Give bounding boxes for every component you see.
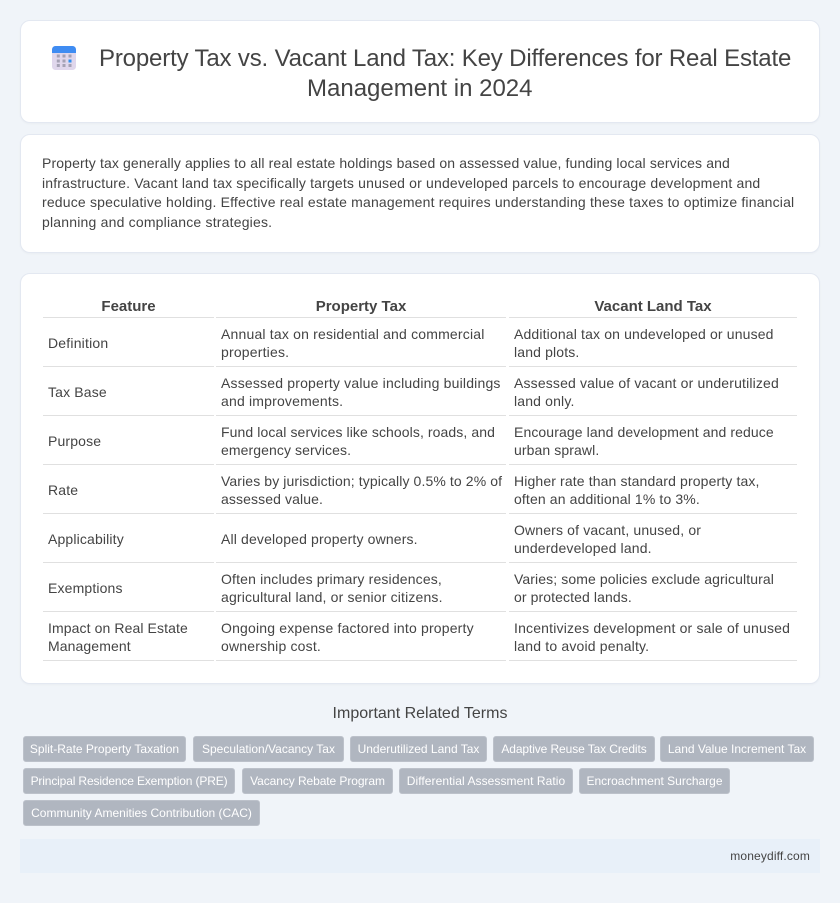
comparison table xyxy=(43,298,797,661)
title xyxy=(99,45,791,102)
row: impact: Impact on Real Estate xyxy=(48,620,188,636)
row: exemptions: Often includes primary residences, xyxy=(221,571,442,587)
header: feature: Feature xyxy=(101,298,156,315)
row: tax base: and improvements. xyxy=(221,393,343,409)
row: purpose: emergency services. xyxy=(221,442,351,458)
title: Management in 2024 xyxy=(307,74,532,102)
tag xyxy=(23,736,186,762)
header card xyxy=(20,20,820,123)
row: purpose xyxy=(48,424,774,458)
related terms heading: Important Related Terms xyxy=(333,705,507,722)
row: definition: land plots. xyxy=(514,344,579,360)
row: impact: Management xyxy=(48,638,131,654)
table card xyxy=(20,273,820,684)
intro text: Property tax generally applies to all real estate holdings based on assessed value, funding local services and xyxy=(42,155,730,171)
intro text: planning and compliance strategies. xyxy=(42,214,272,230)
row: rate xyxy=(48,473,760,507)
tag: Community Amenities Contribution (CAC) xyxy=(31,806,252,820)
row: definition: Additional tax on undeveloped or unused xyxy=(514,326,774,342)
row: impact xyxy=(48,620,790,654)
intro card xyxy=(20,134,820,253)
row: exemptions: Varies; some policies exclude agricultural xyxy=(514,571,774,587)
tag: Principal Residence Exemption (PRE) xyxy=(31,774,227,788)
header: property tax: Property Tax xyxy=(316,298,406,315)
footer bar xyxy=(20,839,820,873)
row: rate: Higher rate than standard property tax, xyxy=(514,473,760,489)
row: exemptions: or protected lands. xyxy=(514,589,632,605)
icon: calendar xyxy=(52,46,76,70)
row: tax base xyxy=(48,375,779,409)
row: tax base: Assessed property value including buildings xyxy=(221,375,501,391)
tag xyxy=(193,736,344,762)
tag: Vacancy Rebate Program xyxy=(250,774,385,788)
intro text xyxy=(42,155,794,230)
tag: Differential Assessment Ratio xyxy=(407,774,565,788)
row: applicability: underdeveloped land. xyxy=(514,540,652,556)
row: purpose: Encourage land development and reduce xyxy=(514,424,774,440)
row: impact: Ongoing expense factored into property xyxy=(221,620,474,636)
row: rate: Rate xyxy=(48,482,78,498)
row: tax base: land only. xyxy=(514,393,574,409)
row: definition: properties. xyxy=(221,344,289,360)
row: definition: Annual tax on residential and commercial xyxy=(221,326,485,342)
footer source: moneydiff.com xyxy=(730,849,810,863)
row: exemptions xyxy=(48,571,774,605)
tag xyxy=(350,736,487,762)
tag xyxy=(23,768,235,794)
tag xyxy=(493,736,655,762)
row: applicability: Applicability xyxy=(48,531,124,547)
row: applicability: Owners of vacant, unused, or xyxy=(514,522,701,538)
intro text: infrastructure. Vacant land tax specifically targets unused or undeveloped parcels to encourage development and xyxy=(42,175,760,191)
tag xyxy=(660,736,814,762)
row: impact: Incentivizes development or sale of unused xyxy=(514,620,790,636)
row: rate: assessed value. xyxy=(221,491,323,507)
row: exemptions: Exemptions xyxy=(48,580,123,596)
title: Property Tax vs. Vacant Land Tax: Key Differences for Real Estate xyxy=(99,45,791,72)
row: rate: often an additional 1% to 3%. xyxy=(514,491,700,507)
row: tax base: Assessed value of vacant or underutilized xyxy=(514,375,779,391)
related terms tags xyxy=(23,736,814,826)
tag xyxy=(399,768,573,794)
intro text: reduce speculative holding. Effective real estate management requires understanding these taxes to optimize financial xyxy=(42,194,794,210)
row: purpose: urban sprawl. xyxy=(514,442,599,458)
row: impact: ownership cost. xyxy=(221,638,321,654)
tag xyxy=(23,800,260,826)
row: definition: Definition xyxy=(48,335,108,351)
tag: Adaptive Reuse Tax Credits xyxy=(501,742,647,756)
row: impact: land to avoid penalty. xyxy=(514,638,649,654)
tag: Speculation/Vacancy Tax xyxy=(202,742,335,756)
tag: Encroachment Surcharge xyxy=(586,774,723,788)
row: applicability xyxy=(48,522,701,556)
tag: Underutilized Land Tax xyxy=(358,742,479,756)
row: exemptions: agricultural land, or senior citizens. xyxy=(221,589,443,605)
row: purpose: Purpose xyxy=(48,433,101,449)
row: definition xyxy=(48,326,774,360)
tag xyxy=(242,768,393,794)
tag: Land Value Increment Tax xyxy=(668,742,806,756)
row: tax base: Tax Base xyxy=(48,384,107,400)
header: vacant land tax: Vacant Land Tax xyxy=(594,298,712,315)
row: purpose: Fund local services like schools, roads, and xyxy=(221,424,495,440)
row: rate: Varies by jurisdiction; typically 0.5% to 2% of xyxy=(221,473,502,489)
tag xyxy=(579,768,730,794)
tag: Split-Rate Property Taxation xyxy=(30,742,179,756)
row: applicability: All developed property owners. xyxy=(221,531,418,547)
